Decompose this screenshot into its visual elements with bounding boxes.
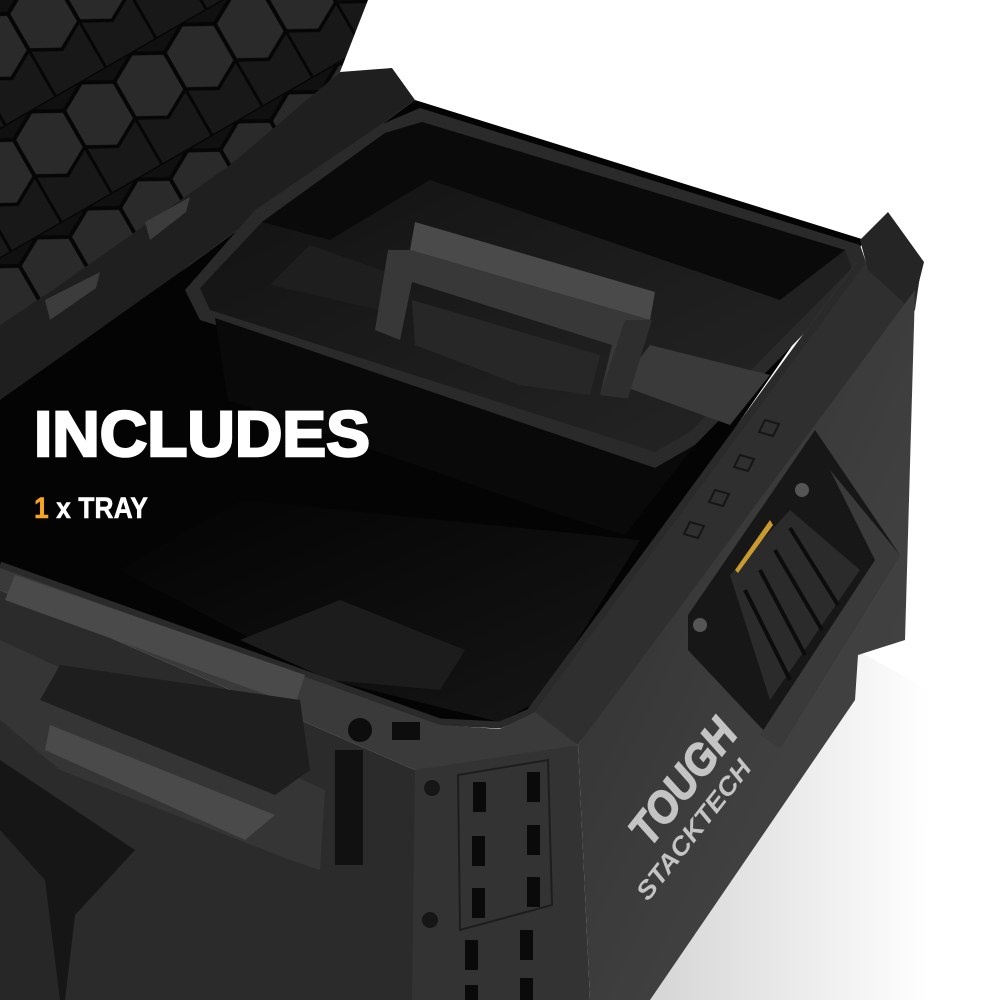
rim corner [860,212,924,310]
logo: STACKTECH: STACKTECH [631,754,758,906]
logo: TOUGH: TOUGH [619,709,748,854]
open lid [0,0,415,405]
front handle [0,575,325,870]
front face [0,590,415,1000]
side latch [688,430,900,748]
brand logo on side [619,709,758,906]
interior floor [120,500,640,722]
tray inner ledge left [270,245,395,310]
right rim [520,262,922,745]
front rim and top edge [0,568,578,770]
floor shadow [650,650,930,1000]
tray rim [185,108,868,468]
box interior [0,100,865,725]
right side panel [578,290,915,1000]
tray handle [375,222,655,398]
tray count: 1 x TRAY [34,492,148,525]
inner lip of box [0,262,862,725]
dark column [335,750,363,865]
tray well [200,122,852,452]
rim square slots [684,420,779,538]
corner post [412,745,590,1000]
heading: INCLUDES [34,398,370,470]
corner socket [348,718,372,742]
tray [185,108,868,535]
front recess and wheel [0,760,135,1000]
tray front wall [215,318,695,535]
